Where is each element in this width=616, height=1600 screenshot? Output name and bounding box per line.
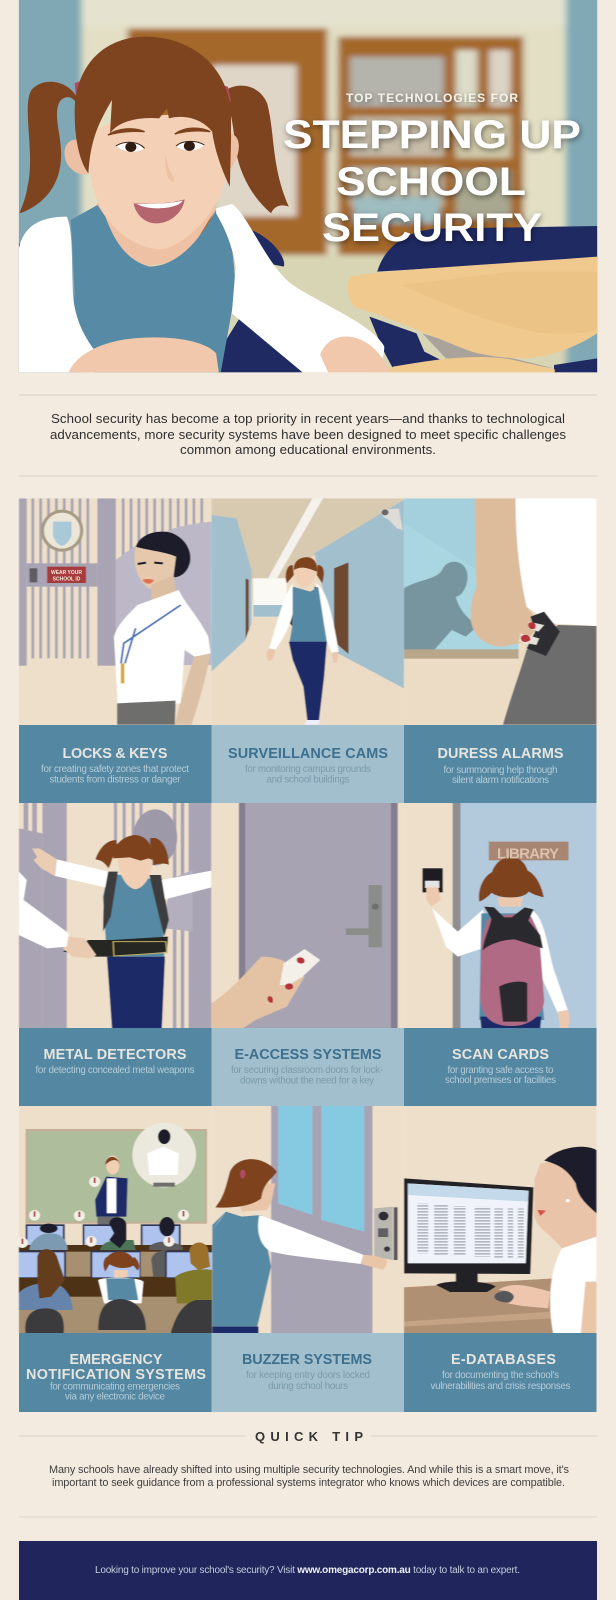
sign: library: LIBRARY (497, 846, 559, 862)
caption: metal detectors: for detecting concealed metal weapons (36, 1065, 195, 1076)
caption: e-databases: E-DATABASES (451, 1352, 556, 1368)
panel art: surveillance cams (211, 498, 404, 725)
caption: locks and keys: students from distress or danger (50, 774, 181, 786)
caption: buzzer systems: BUZZER SYSTEMS (242, 1352, 372, 1368)
sign text: wear your school id: WEAR YOUR (51, 570, 82, 576)
caption: e-access systems (212, 1028, 404, 1106)
row 2 illustrations (19, 803, 596, 1028)
teacher (95, 1177, 128, 1217)
intro text (50, 411, 566, 457)
nose shadow (165, 153, 175, 182)
footer banner: Looking to improve your school's security? Visit www.omegacorp.com.au today to talk to an expert. (95, 1565, 520, 1576)
quick tip text: Many schools have already shifted into using multiple security technologies. And while this is a smart move, it's (49, 1464, 570, 1476)
mouth (134, 199, 185, 223)
desk (422, 333, 554, 368)
caption: duress alarms: silent alarm notifications (452, 775, 549, 786)
blurred classroom background (8, 0, 605, 377)
ears (65, 133, 239, 175)
headline line 2: SCHOOL (336, 160, 526, 204)
chairs (25, 1308, 64, 1333)
caption: metal detectors: METAL DETECTORS (44, 1047, 187, 1063)
caption: e-databases: vulnerabilities and crisis responses (430, 1381, 571, 1392)
walking girl (289, 586, 318, 626)
panel art: scan cards (404, 803, 596, 1028)
caption: emergency notification systems: EMERGENCY (70, 1352, 163, 1368)
quick tip text: important to seek guidance from a professional systems integrator who knows which devices are compatible. (52, 1477, 565, 1489)
eyes (116, 141, 204, 152)
sign text: wear your school id (51, 570, 82, 582)
panel art: emergency notification systems (17, 1106, 212, 1334)
panel art: locks and keys (19, 498, 211, 725)
front monitors (19, 1251, 66, 1278)
caption: duress alarms: DURESS ALARMS (438, 746, 564, 762)
caption: surveillance cams: SURVEILLANCE CAMS (228, 746, 388, 762)
caption: emergency notification systems: via any electronic device (65, 1392, 166, 1402)
caption: locks and keys: LOCKS & KEYS (62, 746, 168, 762)
detector wand (63, 937, 168, 957)
caption: duress alarms (404, 725, 596, 803)
sign text: wear your school id: SCHOOL ID (53, 576, 81, 582)
caption: surveillance cams: and school buildings (266, 774, 350, 786)
caption: buzzer systems (212, 1333, 404, 1412)
row 3 illustrations (17, 1106, 596, 1334)
caption: locks and keys: for creating safety zones that protect (41, 764, 189, 775)
eyebrows (108, 128, 210, 135)
headline line 3: SECURITY (322, 206, 542, 250)
caption: e-databases: for documenting the school's (442, 1370, 559, 1381)
girl (19, 37, 391, 372)
kicker: TOP TECHNOLOGIES FOR (346, 91, 518, 105)
student at door (212, 1212, 271, 1327)
neck (96, 200, 216, 267)
caption: e-access systems: E-ACCESS SYSTEMS (234, 1047, 382, 1063)
chairs (377, 226, 597, 272)
panel art: metal detectors (19, 803, 211, 1028)
caption: surveillance cams (212, 725, 404, 803)
alert bubbles (17, 1176, 189, 1248)
caption: emergency notification systems: NOTIFICATION SYSTEMS (26, 1367, 206, 1383)
shirt (71, 205, 235, 372)
desks (18, 1252, 189, 1334)
caption: scan cards: for granting safe access to (448, 1065, 554, 1076)
caption: emergency notification systems: for communicating emergencies (50, 1382, 180, 1392)
panel art: e-databases (404, 1106, 596, 1334)
caption: scan cards (404, 1028, 596, 1106)
caption: metal detectors (19, 1028, 212, 1106)
hero illustration (8, 0, 605, 377)
intro text: School security has become a top priority in recent years—and thanks to technological (51, 411, 565, 426)
back row monitors (25, 1224, 66, 1240)
caption: scan cards: SCAN CARDS (452, 1047, 549, 1063)
panel art: buzzer systems (212, 1106, 404, 1334)
back row students (29, 1233, 68, 1250)
hands (320, 337, 391, 372)
hair (75, 37, 231, 187)
panel art: duress alarms (404, 498, 596, 725)
panel art: e-access systems (211, 803, 404, 1028)
student (107, 957, 165, 1028)
caption: buzzer systems: for keeping entry doors locked (246, 1370, 370, 1381)
caption: locks and keys (19, 725, 212, 803)
headline line 1: STEPPING UP (283, 113, 581, 157)
caption: e-access systems: downs without the need for a key (240, 1076, 374, 1086)
quick tip text (49, 1464, 570, 1489)
caption: duress alarms: for summoning help through (444, 765, 558, 776)
front students (19, 1282, 73, 1310)
caption: emergency notification systems (19, 1333, 212, 1412)
quick tip heading: QUICK TIP (255, 1429, 363, 1444)
caption: surveillance cams: for monitoring campus grounds (245, 764, 371, 775)
hero title (283, 91, 581, 250)
caption: e-databases (404, 1333, 596, 1412)
row 1 illustrations (19, 498, 596, 725)
caption: scan cards: school premises or facilities (445, 1075, 556, 1086)
sleeves (19, 217, 94, 372)
caption: buzzer systems: during school hours (268, 1381, 348, 1392)
pigtails (20, 82, 77, 213)
intro text: advancements, more security systems have been designed to meet specific challenges (50, 427, 566, 442)
intro text: common among educational environments. (180, 442, 436, 457)
face (88, 115, 231, 249)
caption: e-access systems: for securing classroom doors for lock- (231, 1065, 383, 1076)
student back (432, 908, 487, 957)
footer banner (19, 1541, 597, 1600)
